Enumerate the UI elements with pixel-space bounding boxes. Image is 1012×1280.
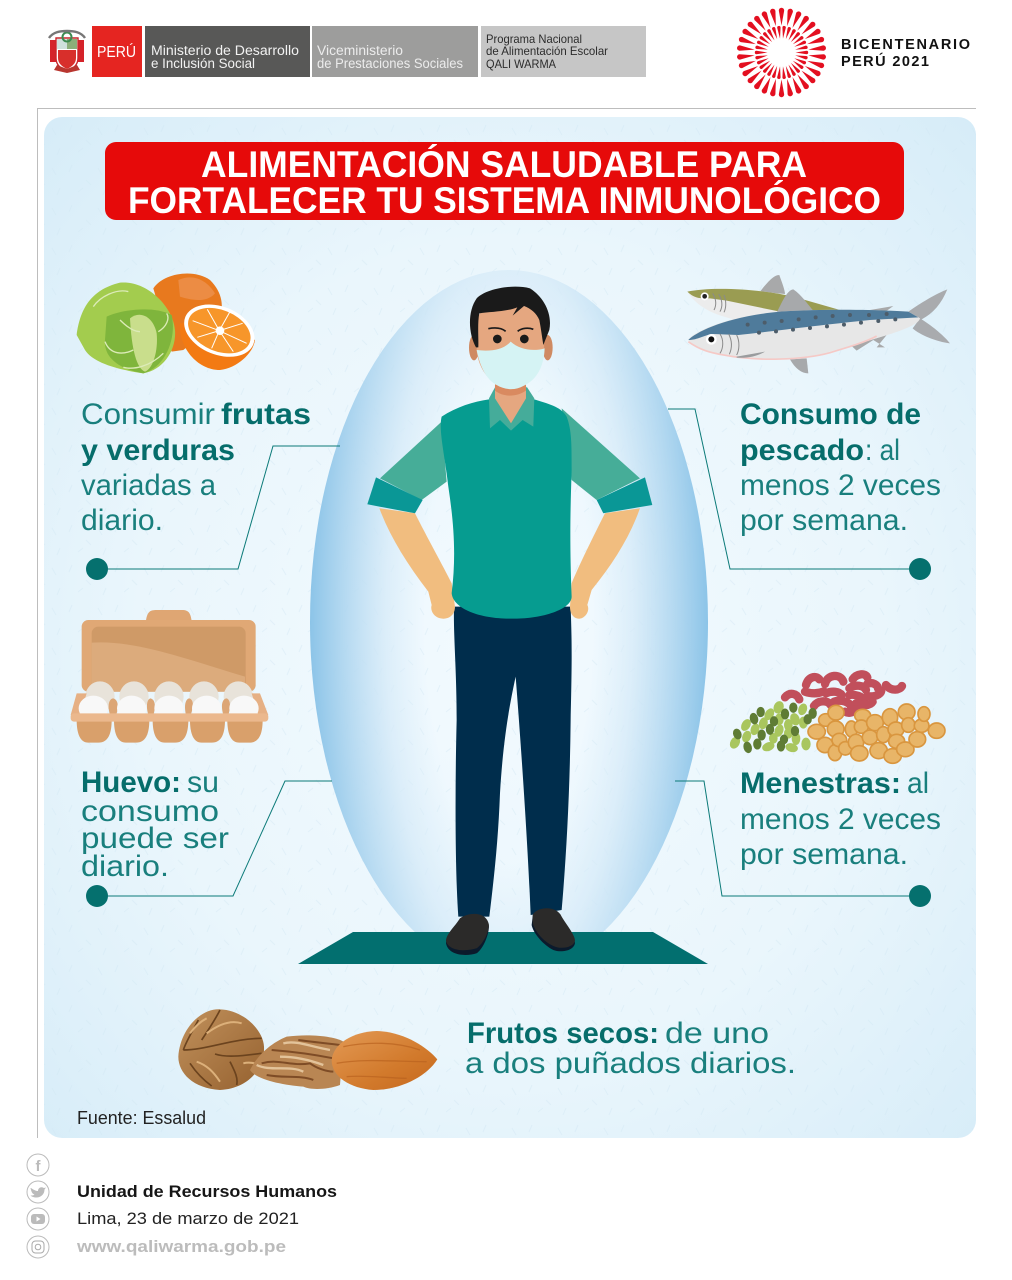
text: legumes: por semana.	[740, 838, 908, 871]
footer text: Unidad de Recursos Humanos	[77, 1182, 337, 1201]
icon: cabbage and oranges	[77, 274, 262, 373]
text: fish	[740, 398, 941, 537]
text: legumes	[740, 767, 941, 871]
icon: sardines	[687, 275, 950, 373]
text: eggs: su	[187, 766, 219, 799]
text: fish: menos 2 veces	[740, 469, 941, 502]
text: eggs: diario.	[81, 850, 169, 883]
ministry block	[145, 26, 310, 77]
connector: legumes to shield	[675, 781, 931, 907]
text: fish: por semana.	[740, 504, 908, 537]
programme block: de Alimentación Escolar	[486, 44, 608, 58]
connector: fish to shield	[668, 409, 931, 580]
upper body	[367, 287, 652, 619]
text: dried fruits and nuts: a dos puñados diarios.	[465, 1047, 796, 1080]
title banner: FORTALECER TU SISTEMA INMUNOLÓGICO	[128, 179, 881, 221]
vice-ministry block: Viceministerio	[317, 43, 403, 58]
text: fish: pescado	[740, 434, 864, 467]
source note: Fuente: Essalud	[77, 1108, 206, 1128]
text: dried fruits and nuts: Frutos secos:	[467, 1017, 659, 1050]
vice-ministry block: de Prestaciones Sociales	[317, 56, 463, 71]
text: fruits and vegetables: frutas	[221, 398, 311, 431]
icon: twitter	[27, 1181, 49, 1203]
title banner	[105, 142, 904, 221]
icon: youtube	[27, 1208, 49, 1230]
vice-ministry block	[312, 26, 478, 77]
floor mat	[298, 932, 708, 964]
bicentenario wordmark	[841, 37, 970, 70]
bicentenario wordmark: BICENTENARIO	[841, 37, 970, 53]
icon: egg carton	[71, 610, 268, 743]
text: legumes: Menestras:	[740, 767, 901, 800]
ministry block: e Inclusión Social	[151, 56, 255, 71]
panel: main infographic background	[44, 117, 976, 1138]
connector: fruit to shield	[86, 446, 340, 580]
text: fruits and vegetables: variadas a	[81, 469, 216, 502]
text: eggs	[81, 766, 229, 883]
footer text	[76, 1182, 337, 1256]
bicentenario wordmark: PERÚ 2021	[841, 52, 929, 70]
header: government logos	[49, 26, 646, 77]
icon: instagram	[27, 1236, 49, 1258]
footer text: Lima, 23 de marzo de 2021	[77, 1209, 299, 1228]
title banner: ALIMENTACIÓN SALUDABLE PARA	[201, 143, 807, 185]
icon: facebook: f	[36, 1158, 42, 1175]
person wearing a mask	[367, 287, 652, 955]
text: legumes: menos 2 veces	[740, 803, 941, 836]
social media icons	[27, 1154, 49, 1258]
text: fruits and vegetables: Consumir	[81, 398, 215, 431]
programme block	[481, 26, 646, 77]
text: fruits and vegetables	[81, 398, 311, 537]
footer text: www.qaliwarma.gob.pe	[76, 1237, 286, 1256]
text: eggs: Huevo:	[81, 766, 181, 799]
text: dried fruits and nuts	[465, 1017, 796, 1080]
text: fish: : al	[865, 434, 900, 467]
icon: legumes	[729, 674, 945, 763]
immunity shield	[310, 270, 708, 974]
red PERÚ block: PERÚ	[97, 42, 136, 61]
shoes	[446, 908, 575, 955]
trousers	[454, 607, 572, 917]
icon: national crest	[49, 31, 85, 73]
connector: egg to shield	[86, 781, 332, 907]
icon: bicentenario sunburst logo	[737, 8, 826, 97]
programme block: QALI WARMA	[486, 57, 556, 71]
text: eggs: puede ser	[81, 822, 229, 855]
ministry block: Ministerio de Desarrollo	[151, 43, 299, 58]
text: fruits and vegetables: diario.	[81, 504, 163, 537]
icon: nuts	[178, 1009, 437, 1090]
programme block: Programa Nacional	[486, 32, 582, 46]
text: legumes: al	[907, 767, 929, 800]
red PERÚ block	[92, 26, 142, 77]
text: dried fruits and nuts: de uno	[665, 1017, 769, 1050]
text: eggs: consumo	[81, 795, 219, 828]
text: fruits and vegetables: y verduras	[81, 434, 235, 467]
text: fish: Consumo de	[740, 398, 921, 431]
